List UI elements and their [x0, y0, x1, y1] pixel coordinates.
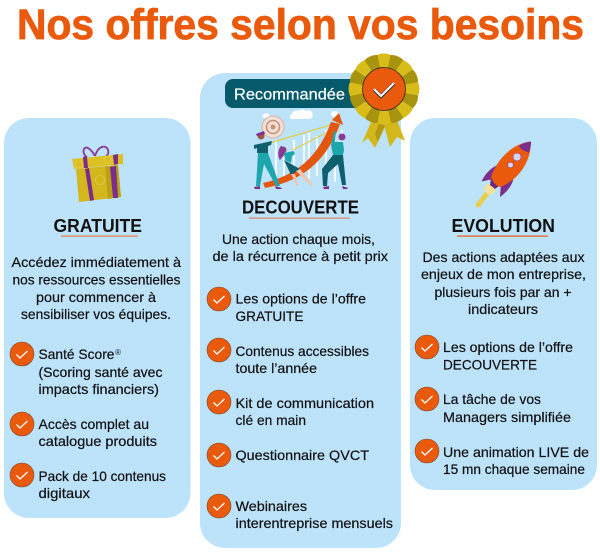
heading: decouverte: DECOUVERTE — [242, 198, 359, 218]
bullet: options decouverte — [415, 335, 573, 372]
bullet: tâche des managers: Managers simplifiée — [443, 409, 571, 425]
bullet: pack de contenus — [10, 463, 166, 501]
description: decouverte — [212, 231, 388, 264]
bullet: options gratuite: Les options de l’offre — [236, 290, 366, 306]
bullet: santé score: (Scoring santé avec — [38, 364, 162, 380]
heading: gratuite: GRATUITE — [54, 216, 142, 236]
bullet: animation live — [415, 439, 589, 477]
illustration: team pulling growth arrow — [254, 109, 348, 189]
bullet: webinaires: interentreprise mensuels — [236, 515, 393, 531]
bullet: pack de contenus: digitaux — [38, 485, 90, 501]
icon: award rosette — [348, 54, 420, 148]
title: Nos offres selon vos besoins — [17, 1, 584, 49]
badge: recommandée — [225, 79, 370, 108]
bullet: contenus accessibles: toute l’année — [236, 360, 317, 376]
icon: rocket — [478, 142, 531, 205]
bullet: pack de contenus: Pack de 10 contenus — [38, 468, 166, 484]
bullet: questionnaire qvct — [207, 443, 369, 467]
description: gratuite — [12, 254, 181, 322]
description: gratuite: Accédez immédiatement à — [12, 254, 181, 270]
bullet: questionnaire qvct: Questionnaire QVCT — [236, 447, 369, 463]
bullet: santé score: Santé Score — [38, 346, 115, 362]
bullet: webinaires: Webinaires — [236, 498, 307, 514]
description: decouverte: de la récurrence à petit prix — [212, 248, 388, 264]
bullet: kit de communication: Kit de communication — [236, 395, 374, 411]
description: decouverte: Une action chaque mois, — [222, 231, 375, 247]
bullet: options decouverte: DECOUVERTE — [443, 356, 537, 372]
bullet: animation live: 15 mn chaque semaine — [443, 461, 585, 477]
panel: decouverte — [200, 73, 401, 548]
bullet: accès complet — [10, 412, 157, 449]
bullet: contenus accessibles — [207, 338, 369, 376]
badge: recommandée: Recommandée — [234, 86, 345, 104]
bullet: animation live: Une animation LIVE de — [443, 444, 589, 460]
bullet: santé score — [10, 342, 162, 397]
bullet: accès complet: Accès complet au — [38, 416, 149, 432]
description: evolution: enjeux de mon entreprise, — [421, 266, 586, 282]
icon: gift — [72, 147, 123, 202]
bullet: contenus accessibles: Contenus accessibles — [236, 343, 369, 359]
description: gratuite: sensibiliser vos équipes. — [21, 306, 171, 322]
bullet: options gratuite: GRATUITE — [236, 308, 304, 324]
description: gratuite: pour commencer à — [36, 289, 156, 305]
description: evolution: Des actions adaptées aux — [422, 249, 584, 265]
panel: evolution — [410, 118, 597, 490]
bullet: santé score: impacts financiers) — [38, 381, 159, 397]
bullet: tâche des managers — [415, 387, 571, 425]
bullet: kit de communication — [207, 390, 374, 428]
description: evolution: indicateurs — [468, 301, 538, 317]
description: evolution — [421, 249, 586, 317]
description: gratuite: nos ressources essentielles — [12, 272, 180, 288]
panel: gratuite — [4, 118, 190, 518]
bullet: santé score: ® — [115, 348, 121, 357]
description: evolution: plusieurs fois par an + — [434, 284, 572, 300]
bullet: options gratuite — [207, 287, 366, 324]
bullet: kit de communication: clé en main — [236, 412, 306, 428]
bullet: options decouverte: Les options de l’offre — [443, 339, 573, 355]
heading: evolution: EVOLUTION — [452, 216, 555, 236]
bullet: accès complet: catalogue produits — [38, 433, 157, 449]
bullet: tâche des managers: La tâche de vos — [443, 391, 541, 407]
bullet: webinaires — [207, 494, 393, 531]
